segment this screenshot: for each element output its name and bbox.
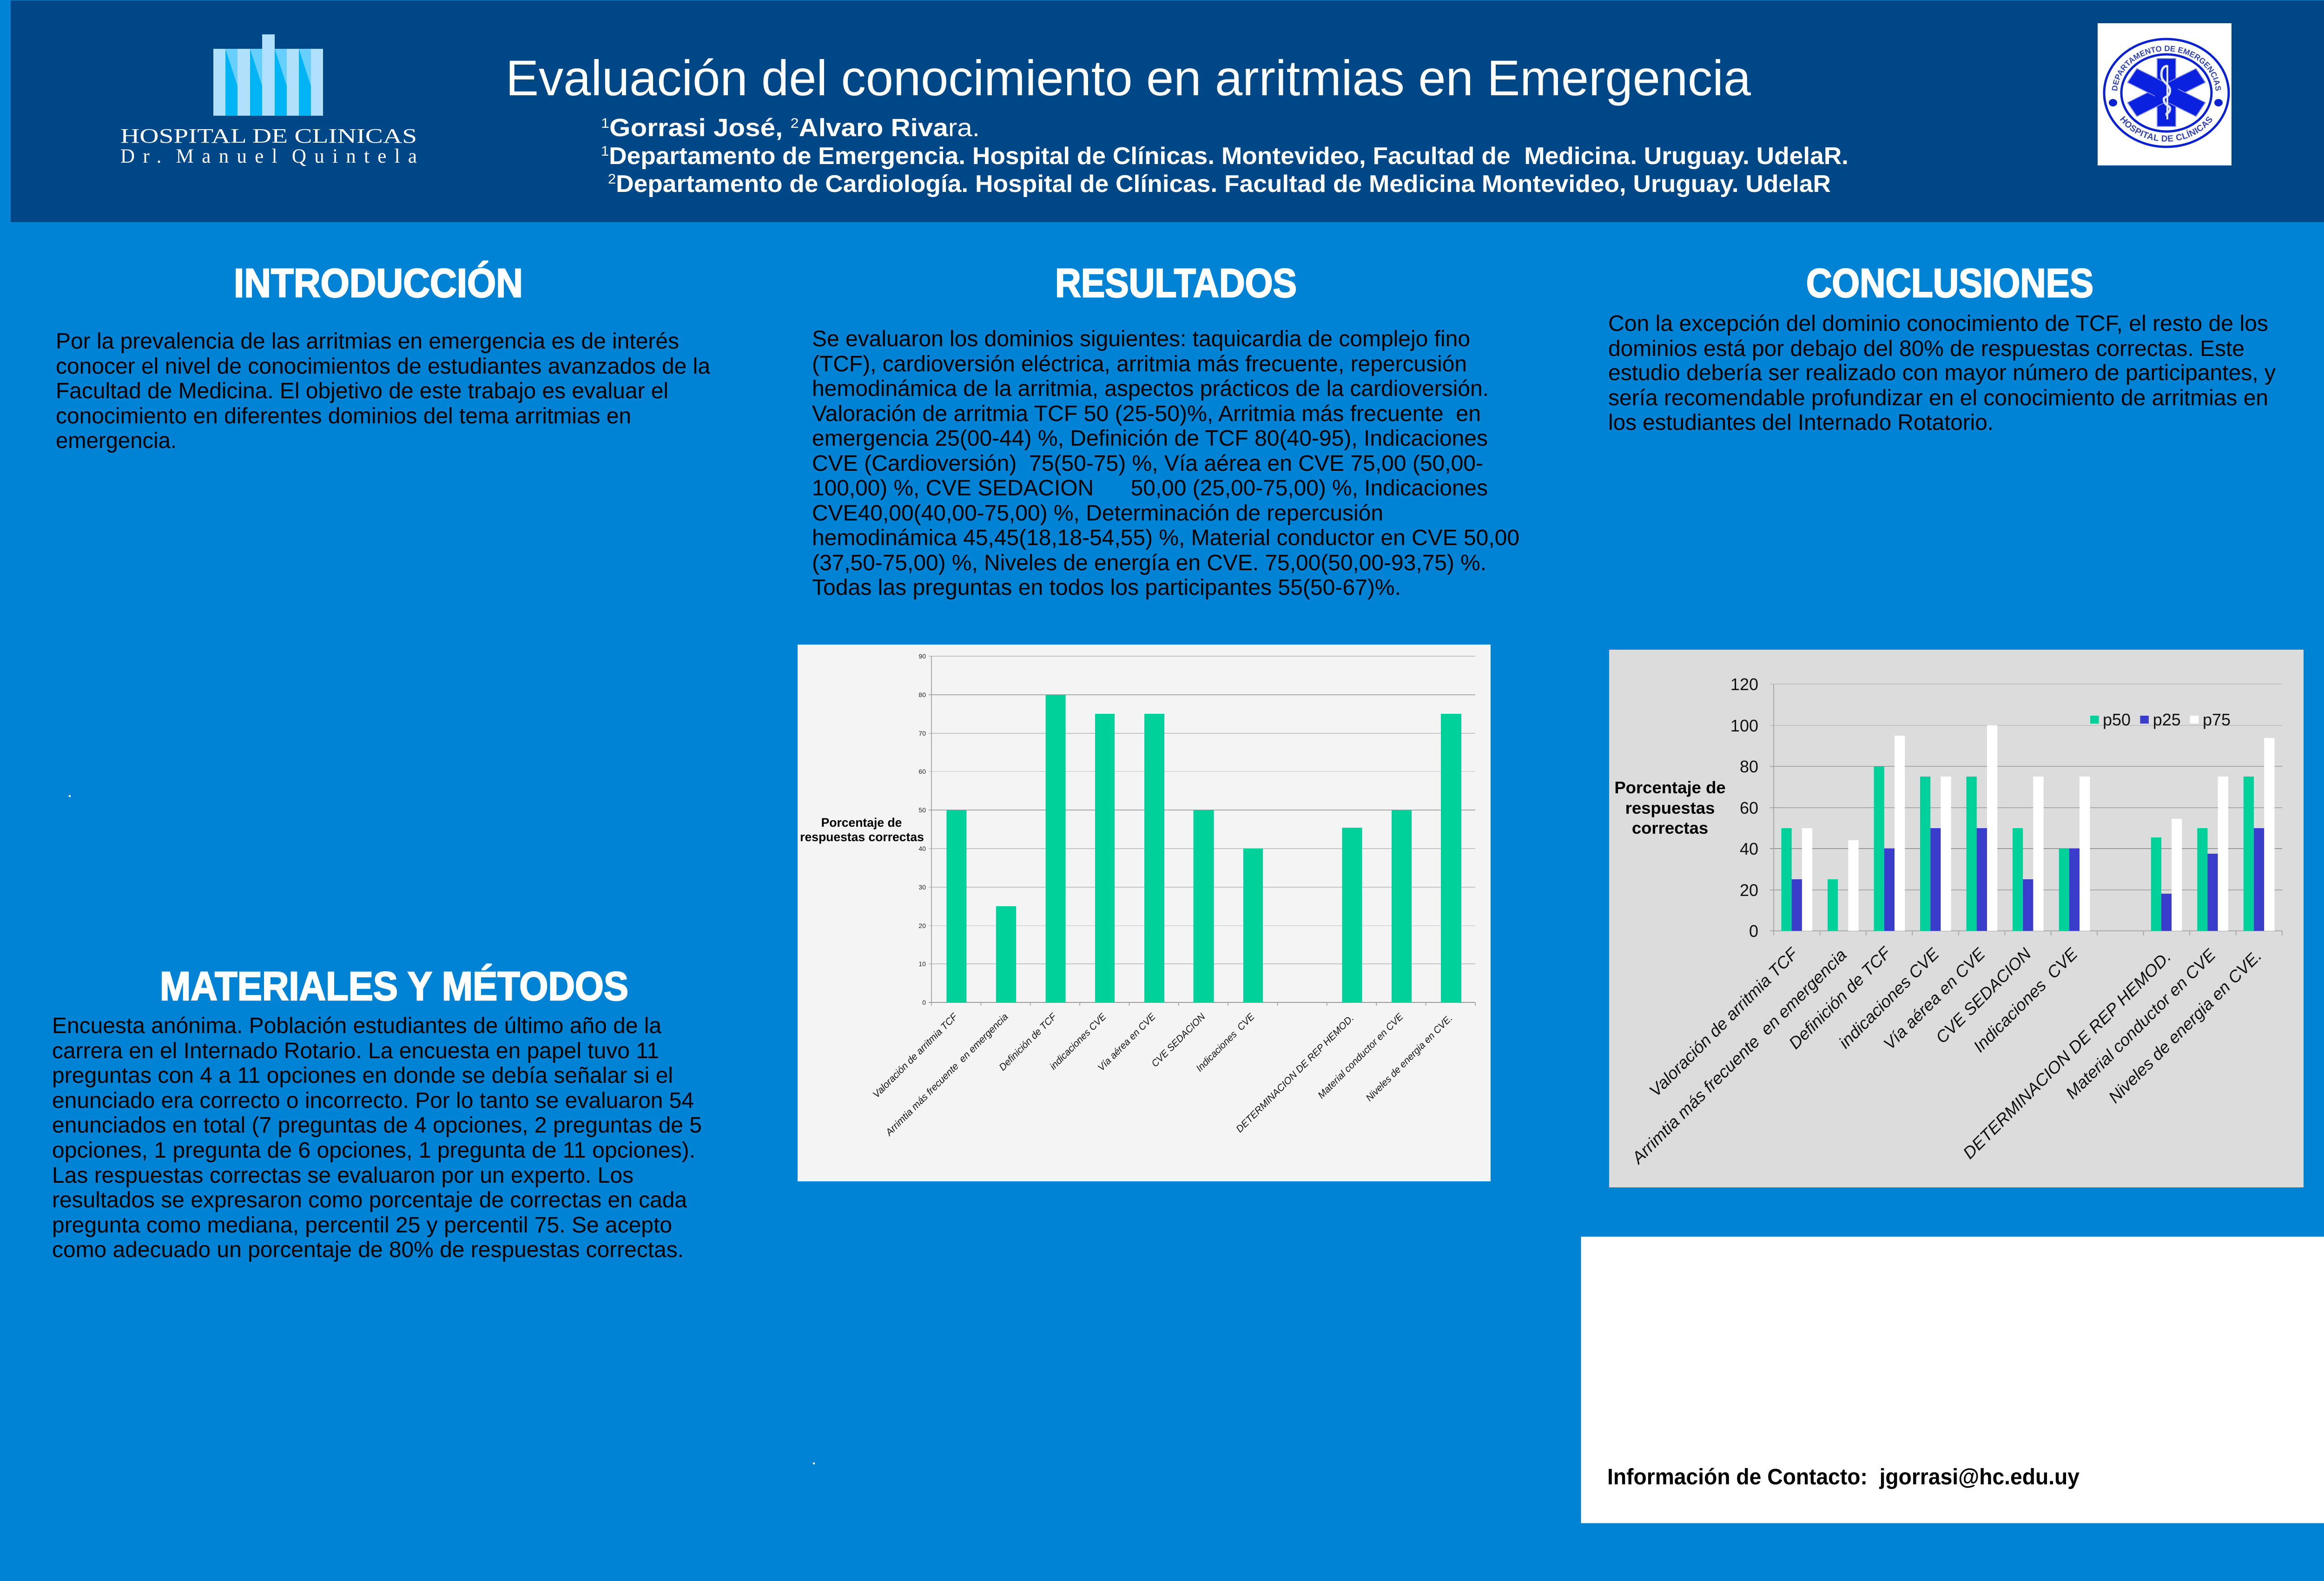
authors: Gorrasi José, xyxy=(609,114,791,142)
text block: materiales y métodos: carrera en el Internado Rotario. La encuesta en papel tuvo 11 xyxy=(52,1039,659,1063)
bar chart: porcentaje de respuestas correctas (mediana): 20 xyxy=(918,922,926,929)
bar chart: p50, p25, p75: 120 xyxy=(1730,675,1758,694)
bar chart: porcentaje de respuestas correctas (mediana): indicaciones CVE xyxy=(1048,1011,1109,1072)
panel: conclusiones xyxy=(1608,261,2276,435)
bar chart: porcentaje de respuestas correctas (mediana): 30 xyxy=(918,883,926,891)
text block: materiales y métodos: como adecuado un porcentaje de 80% de respuestas correctas. xyxy=(52,1238,684,1262)
panel: información de contacto xyxy=(1581,1237,2324,1523)
text block: introducción: conocimiento en diferentes dominios del tema arritmias en xyxy=(56,404,631,428)
heading: resultados: RESULTADOS xyxy=(1055,261,1297,306)
bar chart: porcentaje de respuestas correctas (mediana): 10 xyxy=(918,960,926,968)
contact text: Información de Contacto: jgorrasi@hc.edu.uy xyxy=(1607,1465,2080,1489)
bar chart: porcentaje de respuestas correctas (mediana): 70 xyxy=(918,730,926,737)
text block: introducción: Facultad de Medicina. El objetivo de este trabajo es evaluar el xyxy=(56,379,668,403)
bar chart: p50, p25, p75: correctas xyxy=(1632,818,1708,837)
text block: materiales y métodos xyxy=(52,1014,702,1262)
affiliation 1: 1 xyxy=(601,144,609,159)
authors: 1 xyxy=(601,116,609,131)
heading: introducción: INTRODUCCIÓN xyxy=(234,261,523,306)
text block: resultados: Todas las preguntas en todos los participantes 55(50-67)%. xyxy=(812,575,1401,600)
affiliation 1: Departamento de Emergencia. Hospital de Clínicas. Montevideo, Facultad de Medicina. Uruguay. UdelaR. xyxy=(609,143,1849,170)
text block: materiales y métodos: resultados se expresaron como porcentaje de correctas en cada xyxy=(52,1188,687,1212)
text block: resultados xyxy=(812,327,1519,600)
text block: conclusiones: los estudiantes del Internado Rotatorio. xyxy=(1608,410,1994,435)
text block: resultados: CVE40,00(40,00-75,00) %, Determinación de repercusión xyxy=(812,501,1383,526)
bar chart: p50, p25, p75: 100 xyxy=(1730,716,1758,735)
text block: resultados: emergencia 25(00-44) %, Definición de TCF 80(40-95), Indicaciones xyxy=(812,426,1488,451)
logo: Hospital de Clínicas: HOSPITAL DE CLINICAS xyxy=(120,125,417,147)
chart legend: p75 xyxy=(2203,710,2231,729)
icon: emergency department emblem: HOSPITAL DE CLÍNICAS xyxy=(2118,115,2215,144)
text block: conclusiones: sería recomendable profundizar en el conocimiento de arritmias en xyxy=(1608,386,2268,410)
text block: introducción xyxy=(56,329,710,453)
bar chart: p50, p25, p75: Vía aérea en CVE xyxy=(1880,944,1989,1053)
panel: resultados xyxy=(812,261,1519,600)
authors: Alvaro Riva xyxy=(799,114,949,142)
logo: Hospital de Clínicas xyxy=(120,34,417,167)
bar chart: porcentaje de respuestas correctas (mediana): DETERMINACION DE REP HEMOD. xyxy=(1234,1013,1356,1135)
bar chart: p50, p25, p75: DETERMINACION DE REP HEMOD. xyxy=(1959,947,2175,1163)
bar chart: p50, p25, p75: 20 xyxy=(1740,881,1758,900)
bar chart: p50, p25, p75: indicaciones CVE xyxy=(1835,944,1943,1052)
bar chart: p50, p25, p75: Definición de TCF xyxy=(1785,942,1895,1053)
bar chart: porcentaje de respuestas correctas (mediana): Valoración de arritmia TCF xyxy=(871,1011,960,1100)
header banner xyxy=(11,0,2324,222)
bar chart: porcentaje de respuestas correctas (mediana): 60 xyxy=(918,768,926,775)
text block: introducción: conocer el nivel de conocimientos de estudiantes avanzados de la xyxy=(56,354,710,379)
icon: emergency department emblem: DEPARTAMENTO DE EMERGENCIAS xyxy=(2110,44,2223,92)
bar chart: p50, p25, p75: CVE SEDACION xyxy=(1932,944,2035,1047)
bar chart: porcentaje de respuestas correctas (mediana): Indicaciones CVE xyxy=(1194,1011,1257,1074)
text block: conclusiones: Con la excepción del dominio conocimiento de TCF, el resto de los xyxy=(1608,311,2268,336)
bar chart: p50, p25, p75: Niveles de energia en CVE. xyxy=(2105,946,2265,1107)
heading: conclusiones: CONCLUSIONES xyxy=(1806,261,2093,306)
affiliation 2: 2 xyxy=(608,171,616,187)
chart legend xyxy=(2090,710,2231,729)
bar chart: porcentaje de respuestas correctas (mediana) xyxy=(798,645,1491,1181)
bar chart: p50, p25, p75: Porcentaje de xyxy=(1614,778,1726,797)
bar chart: porcentaje de respuestas correctas (mediana): 40 xyxy=(918,845,926,852)
bar chart: porcentaje de respuestas correctas (mediana): Niveles de energia en CVE. xyxy=(1364,1013,1455,1103)
affiliation 2: Departamento de Cardiología. Hospital de Clínicas. Facultad de Medicina Montevideo, Uruguay. UdelaR xyxy=(616,171,1831,198)
text block: materiales y métodos: enunciados en total (7 preguntas de 4 opciones, 2 preguntas de 5 xyxy=(52,1113,702,1138)
bar chart: porcentaje de respuestas correctas (mediana): CVE SEDACION xyxy=(1149,1011,1208,1069)
text block: introducción: Por la prevalencia de las arritmias en emergencia es de interés xyxy=(56,329,679,354)
text block: conclusiones: dominios está por debajo del 80% de respuestas correctas. Este xyxy=(1608,336,2245,361)
text block: materiales y métodos: enunciado era correcto o incorrecto. Por lo tanto se evaluaron 54 xyxy=(52,1088,694,1113)
bar chart: porcentaje de respuestas correctas (mediana): 50 xyxy=(918,806,926,814)
bar chart: p50, p25, p75: respuestas xyxy=(1625,798,1715,817)
text block: materiales y métodos: pregunta como mediana, percentil 25 y percentil 75. Se acepto xyxy=(52,1213,672,1238)
bar chart: porcentaje de respuestas correctas (mediana): respuestas correctas xyxy=(800,830,924,844)
heading: materiales y métodos: MATERIALES Y MÉTODOS xyxy=(160,964,628,1009)
chart legend: p25 xyxy=(2153,710,2181,729)
panel: introducción xyxy=(56,261,710,453)
bar chart: porcentaje de respuestas correctas (mediana): Definición de TCF xyxy=(997,1011,1059,1073)
bar chart: p50, p25, p75: 0 xyxy=(1749,922,1758,941)
text block: resultados: hemodinámica 45,45(18,18-54,55) %, Material conductor en CVE 50,00 xyxy=(812,526,1519,550)
bar chart: porcentaje de respuestas correctas (mediana): Porcentaje de xyxy=(821,816,902,830)
bar chart: porcentaje de respuestas correctas (mediana): Arrimtia más frecuente en emergencia xyxy=(883,1011,1010,1139)
text block: materiales y métodos: Las respuestas correctas se evaluaron por un experto. Los xyxy=(52,1163,634,1188)
text block: materiales y métodos: preguntas con 4 a 11 opciones en donde se debía señalar si el xyxy=(52,1063,673,1088)
text block: resultados: Valoración de arritmia TCF 50 (25-50)%, Arritmia más frecuente en xyxy=(812,402,1481,426)
bar chart: p50, p25, p75: Indicaciones CVE xyxy=(1969,944,2081,1056)
authors: ra. xyxy=(948,114,980,142)
bar chart: p50, p25, p75 xyxy=(1609,650,2304,1187)
bar chart: p50, p25, p75: 60 xyxy=(1740,798,1758,817)
bar chart: porcentaje de respuestas correctas (mediana): 90 xyxy=(918,652,926,660)
chart legend: p50 xyxy=(2103,710,2131,729)
bar chart: p50, p25, p75: Valoración de arritmia TCF xyxy=(1645,943,1802,1100)
bar chart: p50, p25, p75: Arrimtia más frecuente en emergencia xyxy=(1627,945,1850,1168)
text block: conclusiones: estudio debería ser realizado con mayor número de participantes, y xyxy=(1608,361,2276,385)
bar chart: p50, p25, p75: 80 xyxy=(1740,757,1758,776)
text block: resultados: CVE (Cardioversión) 75(50-75) %, Vía aérea en CVE 75,00 (50,00- xyxy=(812,451,1483,476)
bar chart: p50, p25, p75: 40 xyxy=(1740,839,1758,858)
authors: 2 xyxy=(791,116,799,131)
text block: materiales y métodos: opciones, 1 pregunta de 6 opciones, 1 pregunta de 11 opciones). xyxy=(52,1138,695,1163)
panel: materiales y métodos xyxy=(52,964,702,1262)
bar chart: p50, p25, p75: Material conductor en CVE xyxy=(2062,945,2219,1102)
logo: Hospital de Clínicas: Dr. Manuel Quintela xyxy=(120,145,417,167)
text block: introducción: emergencia. xyxy=(56,428,177,453)
text block: resultados: (37,50-75,00) %, Niveles de energía en CVE. 75,00(50,00-93,75) %. xyxy=(812,551,1486,575)
text block: resultados: (TCF), cardioversión eléctrica, arritmia más frecuente, repercusión xyxy=(812,352,1467,376)
title: Evaluación del conocimiento en arritmias en Emergencia xyxy=(506,50,1751,106)
bar chart: porcentaje de respuestas correctas (mediana): Vía aérea en CVE xyxy=(1096,1011,1158,1073)
bar chart: porcentaje de respuestas correctas (mediana): 0 xyxy=(922,999,926,1006)
bar chart: porcentaje de respuestas correctas (mediana): 80 xyxy=(918,691,926,698)
bar chart: porcentaje de respuestas correctas (mediana): Material conductor en CVE xyxy=(1316,1011,1406,1101)
text block: resultados: 100,00) %, CVE SEDACION 50,00 (25,00-75,00) %, Indicaciones xyxy=(812,476,1488,501)
text block: conclusiones xyxy=(1608,311,2276,435)
text block: resultados: Se evaluaron los dominios siguientes: taquicardia de complejo fino xyxy=(812,327,1470,351)
text block: resultados: hemodinámica de la arritmia, aspectos prácticos de la cardioversión. xyxy=(812,376,1489,401)
icon: emergency department emblem xyxy=(2098,23,2232,165)
text block: materiales y métodos: Encuesta anónima. Población estudiantes de último año de la xyxy=(52,1014,661,1038)
